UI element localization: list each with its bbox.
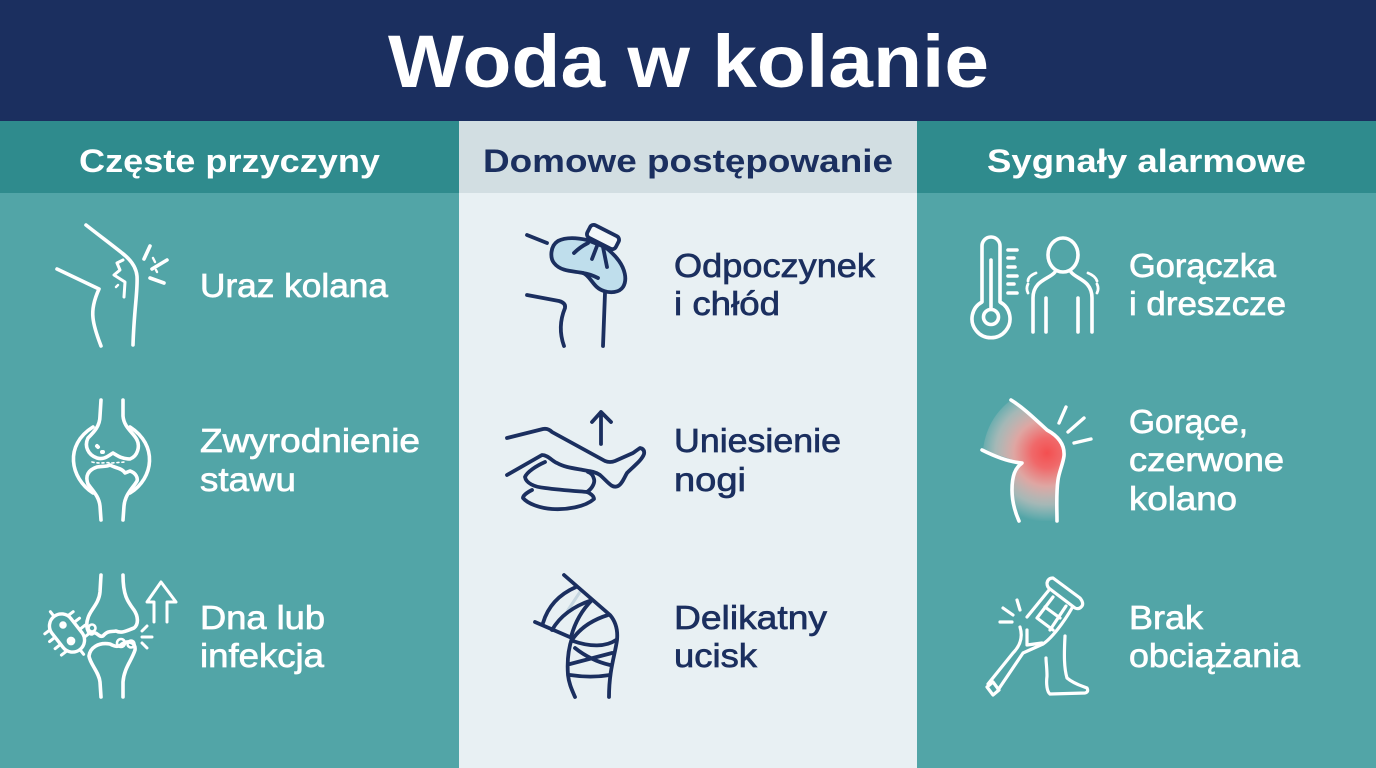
icon: gout or infection — [35, 575, 176, 697]
icon: knee injury — [57, 225, 167, 346]
text: degeneration — [200, 422, 420, 498]
icon: raised leg — [507, 412, 644, 509]
text: gout or infection: infekcja — [200, 637, 325, 674]
text: knee injury: Uraz kolana — [200, 267, 389, 304]
text: leg elevation — [674, 422, 841, 498]
heading: warning signs — [917, 121, 1376, 193]
text: hot red knee: czerwone — [1129, 441, 1284, 478]
text: fever and chills — [1129, 247, 1286, 322]
icon: degenerated joint — [73, 400, 150, 520]
heading: causes — [0, 121, 459, 193]
text: unable to bear weight: Brak — [1129, 599, 1204, 636]
icon: ice pack — [527, 223, 625, 346]
text: gentle compression: ucisk — [674, 637, 758, 674]
icon: thermometer and chills — [972, 237, 1098, 338]
text: rest and cold: Odpoczynek — [674, 247, 876, 284]
text: degeneration: Zwyrodnienie — [200, 422, 420, 459]
heading: home care — [459, 121, 917, 193]
text: rest and cold: i chłód — [674, 285, 780, 322]
heading: home care: Domowe postępowanie — [483, 143, 893, 179]
text: degeneration: stawu — [200, 461, 296, 498]
text: fever and chills: Gorączka — [1129, 247, 1277, 284]
icon: hot red knee — [982, 400, 1091, 521]
panel: causes — [0, 121, 459, 768]
heading: warning signs: Sygnały alarmowe — [987, 143, 1306, 179]
heading: causes: Częste przyczyny — [79, 143, 380, 179]
text: unable to bear weight — [1129, 599, 1301, 674]
text: hot red knee: Gorące, — [1129, 403, 1248, 440]
text: hot red knee — [1129, 403, 1284, 517]
text: gout or infection — [200, 599, 325, 674]
title: Woda w kolanie — [388, 20, 989, 103]
title banner — [0, 0, 1376, 121]
text: rest and cold — [674, 247, 876, 322]
text: hot red knee: kolano — [1129, 480, 1237, 517]
text: leg elevation: nogi — [674, 461, 746, 498]
text: fever and chills: i dreszcze — [1129, 285, 1286, 322]
text: gentle compression — [674, 599, 828, 674]
text: gentle compression: Delikatny — [674, 599, 828, 636]
panel: home care — [459, 121, 917, 768]
icon: crutch and leg — [987, 578, 1088, 695]
panel: warning signs — [917, 121, 1376, 768]
text: leg elevation: Uniesienie — [674, 422, 841, 459]
text: gout or infection: Dna lub — [200, 599, 325, 636]
text: unable to bear weight: obciążania — [1129, 637, 1301, 674]
icon: bandaged knee — [535, 575, 617, 697]
